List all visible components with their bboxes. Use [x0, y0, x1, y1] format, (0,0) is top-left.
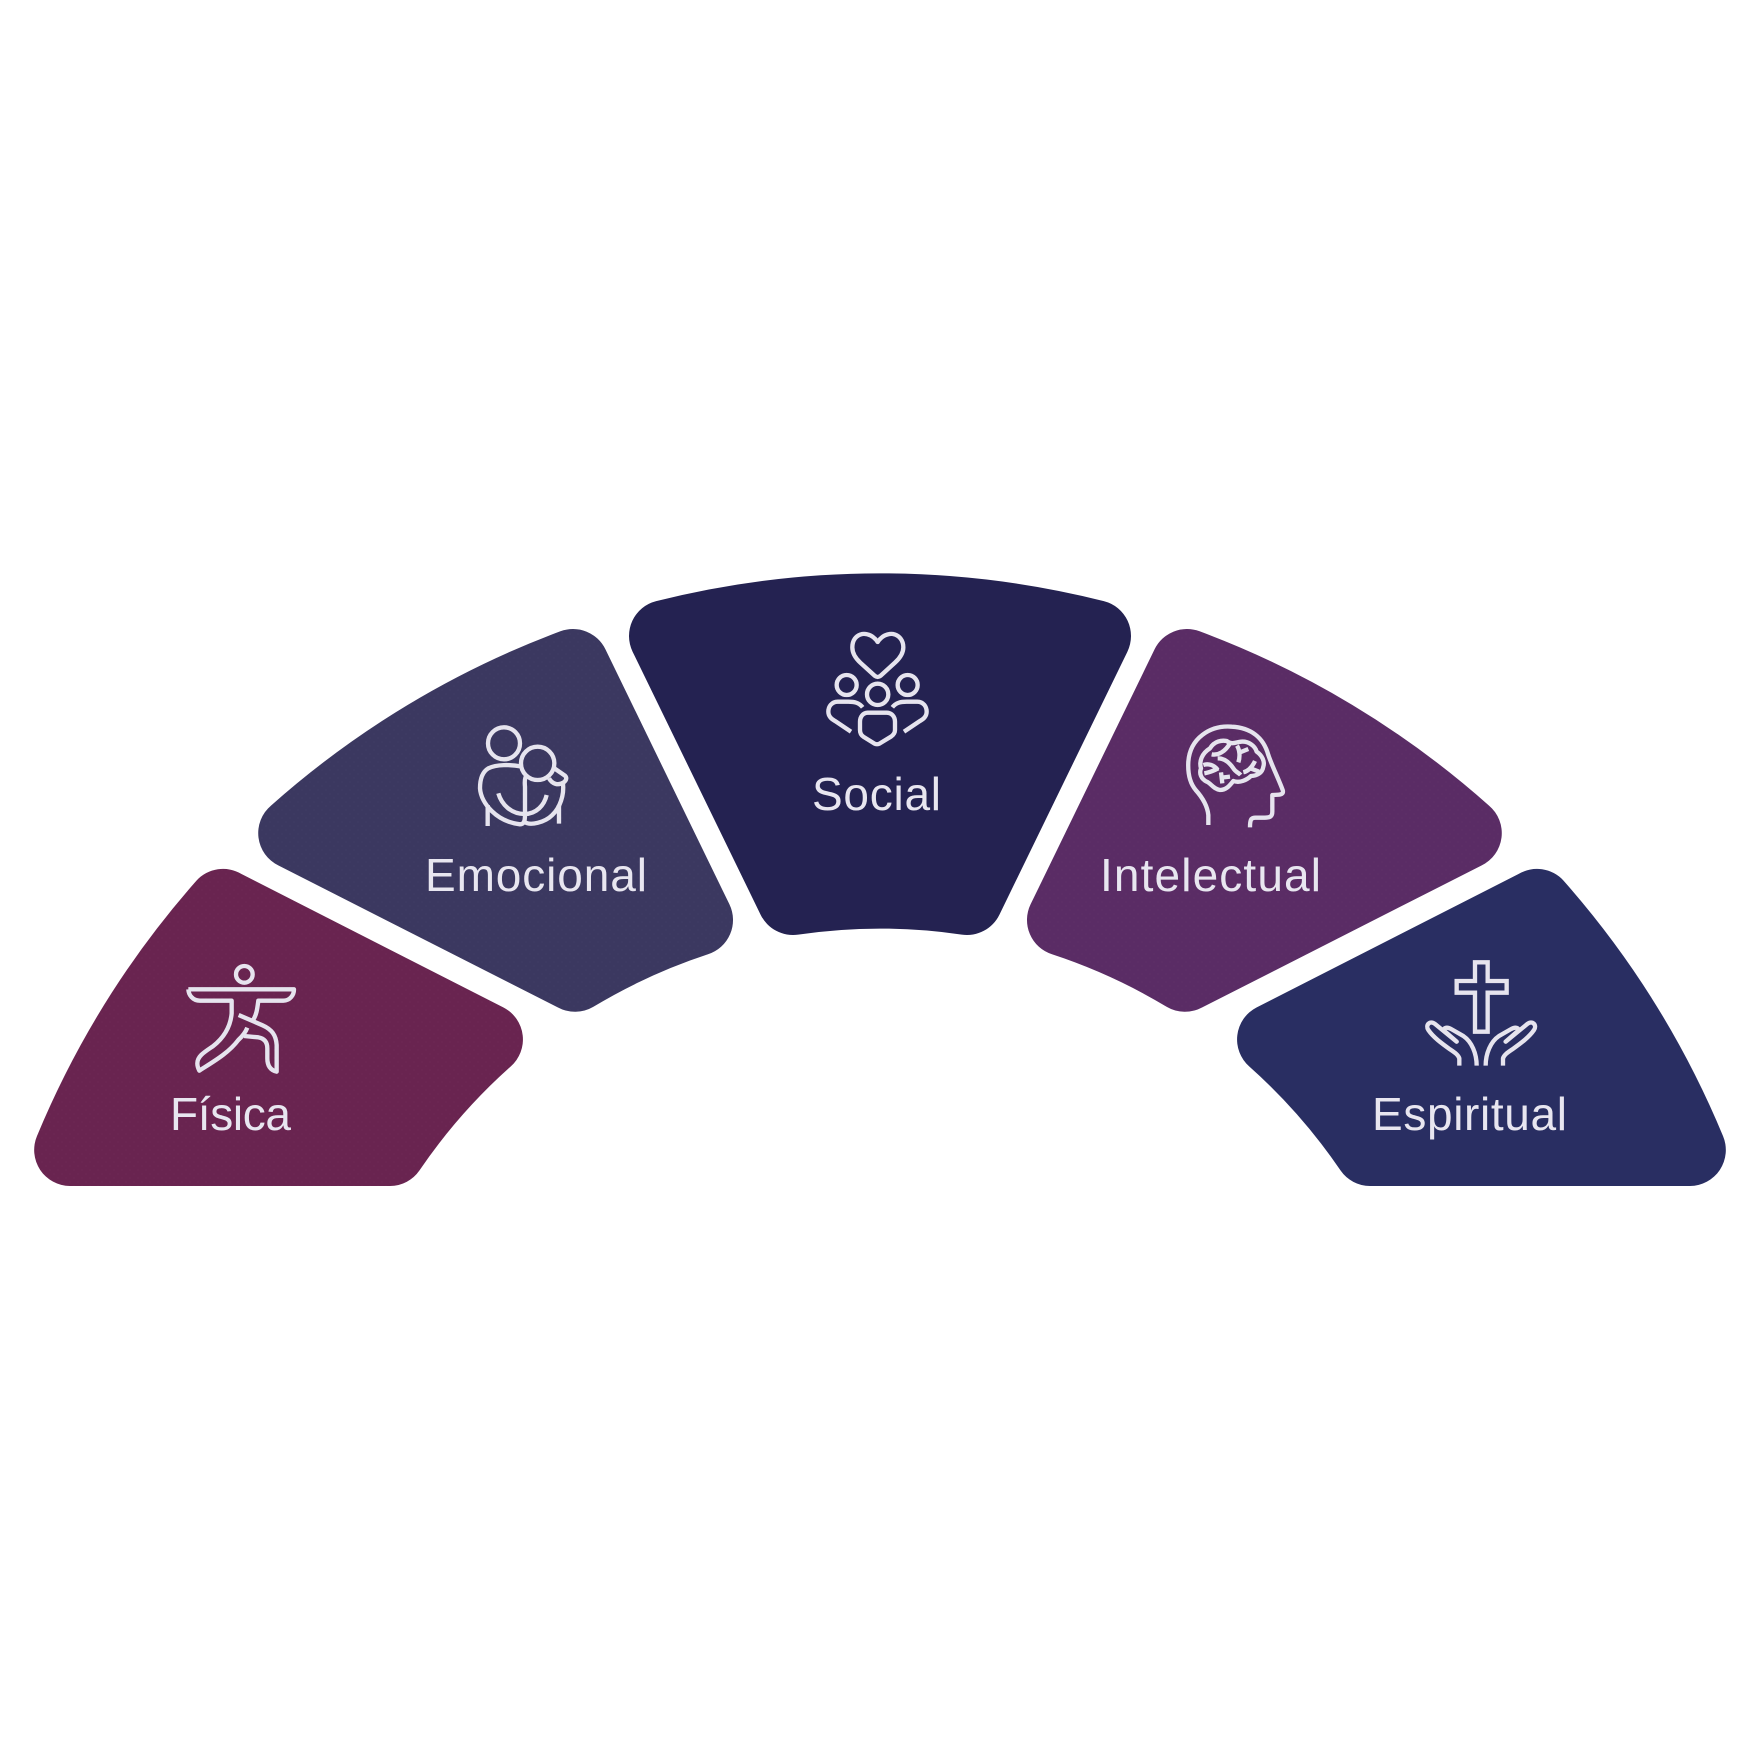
icon: yoga warrior pose [188, 966, 294, 1072]
label: Espiritual: Espiritual [1372, 1088, 1567, 1140]
icon: cross and open hands [1427, 962, 1535, 1066]
panel: Emocional [258, 629, 733, 1012]
segment shape: Física [34, 869, 523, 1186]
segment shape: Espiritual [1237, 869, 1726, 1186]
segment shape: Social [629, 573, 1131, 935]
label: Intelectual: Intelectual [1100, 849, 1321, 901]
segment shape: Emocional [258, 629, 733, 1012]
panel: Espiritual [1237, 869, 1726, 1186]
icon: head with brain [1188, 727, 1283, 827]
panel: Física [34, 869, 523, 1186]
panel: Intelectual [1027, 629, 1502, 1012]
icon: people with heart [828, 634, 927, 744]
label: Emocional: Emocional [425, 849, 647, 901]
segment shape: Intelectual [1027, 629, 1502, 1012]
icon: embracing people [480, 727, 566, 826]
label: Física: Física [170, 1088, 291, 1140]
panel: Social [629, 573, 1131, 935]
label: Social: Social [812, 768, 941, 820]
